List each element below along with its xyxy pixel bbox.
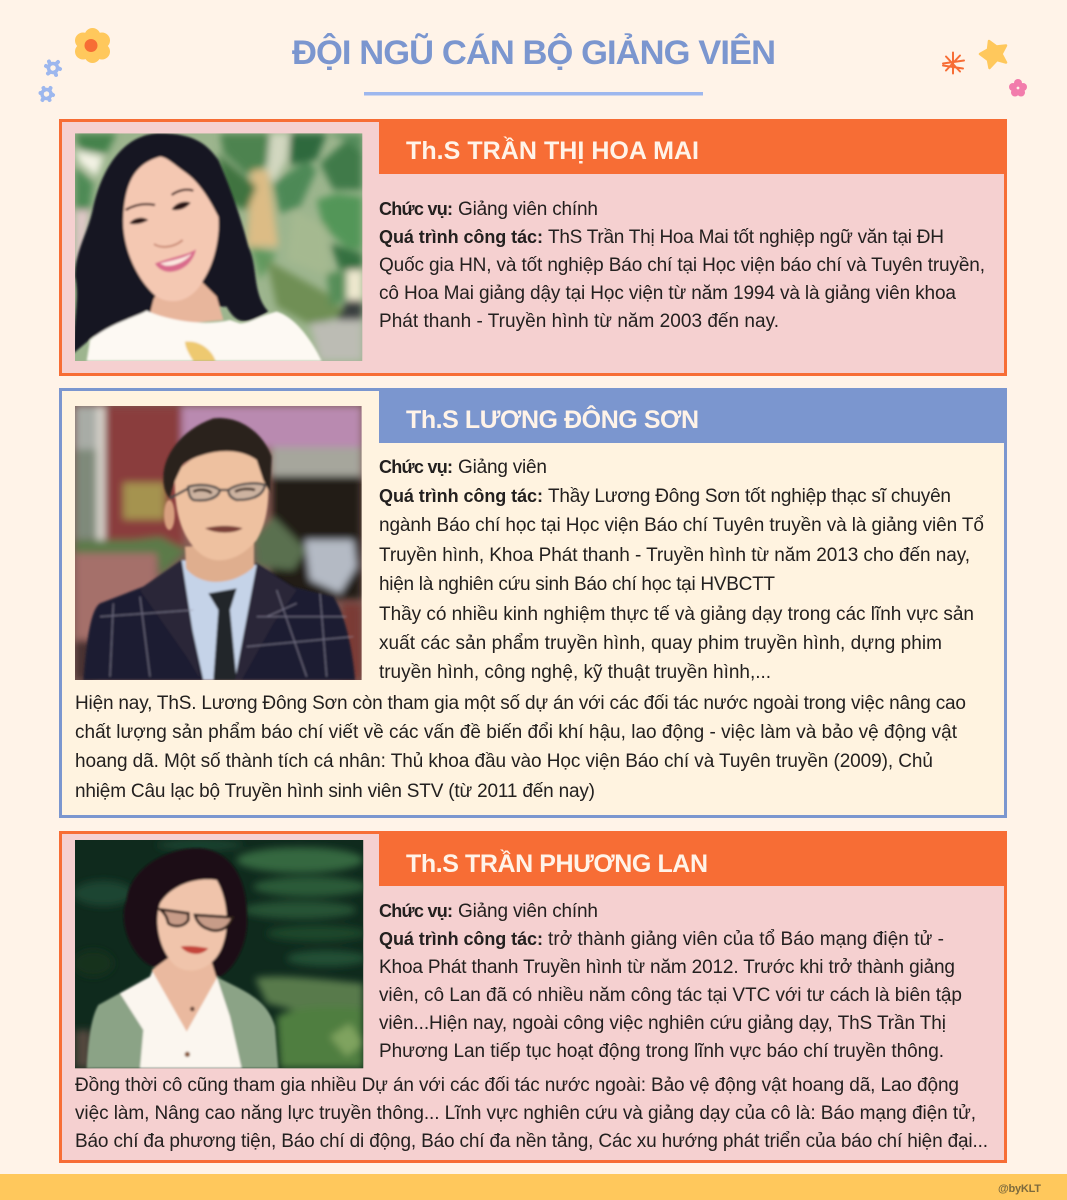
text block: bio full width: việc làm, Nâng cao năng lực truyền thông... Lĩnh vực nghiên cứu và giảng dạy của cô là: Báo mạng điện tử, [75,1103,976,1124]
heading bar: Th.S TRẦN THỊ HOA MAI [406,136,699,165]
text block: bio full width [75,1075,988,1152]
text block: bio full width: chất lượng sản phẩm báo chí viết về các vấn đề biến đổi khí hậu, lao động - việc làm và bảo vệ động vật [75,722,958,743]
icon: yellow star [980,41,1006,68]
panel: Trần Thị Hoa Mai [60,120,1006,374]
text block: bio beside photo: viên...Hiện nay, ngoài công việc nghiên cứu giảng dạy, ThS Trần Thị [379,1013,946,1034]
text block: bio beside photo: ngành Báo chí học tại Học viện Báo chí Tuyên truyền và là giảng viên Tổ [379,515,984,536]
text block: bio full width: nhiệm Câu lạc bộ Truyền hình sinh viên STV (từ 2011 đến nay) [75,781,595,802]
text block: bio: Giảng viên chính [458,199,598,220]
text block: bio beside photo: Thầy có nhiều kinh nghiệm thực tế và giảng dạy trong các lĩnh vực sản [379,604,974,625]
heading bar [379,391,1004,443]
footer bar [0,1174,1067,1200]
title underline [364,92,703,96]
text block: bio: cô Hoa Mai giảng dậy tại Học viện từ năm 1994 và là giảng viên khoa [379,283,956,304]
text block: bio beside photo: Phương Lan tiếp tục hoạt động trong lĩnh vực báo chí truyền thông. [379,1041,944,1062]
photo: Trần Phương Lan portrait [73,840,367,1068]
text block: bio beside photo: Giảng viên [458,457,547,478]
text block: bio full width: Hiện nay, ThS. Lương Đông Sơn còn tham gia một số dự án với các đối tác nước ngoài trong việc nâng cao [75,693,966,714]
title: ĐỘI NGŨ CÁN BỘ GIẢNG VIÊN [292,32,776,72]
text block: bio beside photo: trở thành giảng viên của tổ Báo mạng điện tử - [548,929,944,950]
text block: bio beside photo [379,901,962,1062]
text block: bio beside photo: Quá trình công tác: [379,486,543,506]
icon: orange flower [75,28,110,63]
text block: bio beside photo: Truyền hình, Khoa Phát thanh - Truyền hình từ năm 2013 cho đến nay, [379,545,970,566]
photo: Hoa Mai portrait [73,133,362,361]
text block: bio [379,199,985,332]
heading bar [379,122,1004,174]
text block: bio beside photo: Khoa Phát thanh Truyền hình từ năm 2012. Trước khi trở thành giảng [379,957,955,978]
text block: bio beside photo: Chức vụ: [379,457,453,477]
text block: bio beside photo: Quá trình công tác: [379,929,543,949]
panel: Lương Đông Sơn [60,390,1006,816]
heading bar [379,834,1004,886]
text block: bio full width: hoang dã. Một số thành tích cá nhân: Thủ khoa đầu vào Học viện Báo chí và Tuyên truyền (2009), Chủ [75,751,933,772]
text block: bio full width: Báo chí đa phương tiện, Báo chí di động, Báo chí đa nền tảng, Các xu hướng phát triển của báo chí hiện đại... [75,1131,988,1152]
text block: bio: Quá trình công tác: [379,227,543,247]
text block: bio full width [75,693,966,802]
icon: orange asterisk [943,52,964,74]
photo: Lương Đông Sơn portrait [75,406,362,680]
text block: bio: Quốc gia HN, và tốt nghiệp Báo chí tại Học viện báo chí và Tuyên truyền, [379,255,985,276]
heading bar: Th.S LƯƠNG ĐÔNG SƠN [406,404,699,434]
icon: blue flower lower [40,88,53,100]
text block: bio beside photo: viên, cô Lan đã có nhiều năm công tác tại VTC với tư cách là biên tập [379,985,962,1006]
text block: bio beside photo: Giảng viên chính [458,901,598,922]
icon: blue flower upper [46,62,60,75]
heading bar: Th.S TRẦN PHƯƠNG LAN [406,849,708,878]
text block: bio: Chức vụ: [379,199,453,219]
text block: bio beside photo [379,457,984,683]
text block: bio beside photo: Thầy Lương Đông Sơn tốt nghiệp thạc sĩ chuyên [548,486,951,507]
icon: pink flower [1009,79,1027,96]
text block: bio beside photo: hiện là nghiên cứu sinh Báo chí học tại HVBCTT [379,574,775,595]
text block: bio beside photo: truyền hình, công nghệ, kỹ thuật truyền hình,... [379,662,771,683]
text block: bio: Phát thanh - Truyền hình từ năm 2003 đến nay. [379,311,779,332]
text block: bio: ThS Trần Thị Hoa Mai tốt nghiệp ngữ văn tại ĐH [548,227,944,248]
panel: Trần Phương Lan [60,832,1006,1162]
text block: bio beside photo: xuất các sản phẩm truyền hình, quay phim truyền hình, dựng phim [379,633,942,654]
text block: bio full width: Đồng thời cô cũng tham gia nhiều Dự án với các đối tác nước ngoài: Bảo vệ động vật hoang dã, Lao động [75,1075,959,1096]
credit: @byKLT [998,1183,1041,1195]
text block: bio beside photo: Chức vụ: [379,901,453,921]
